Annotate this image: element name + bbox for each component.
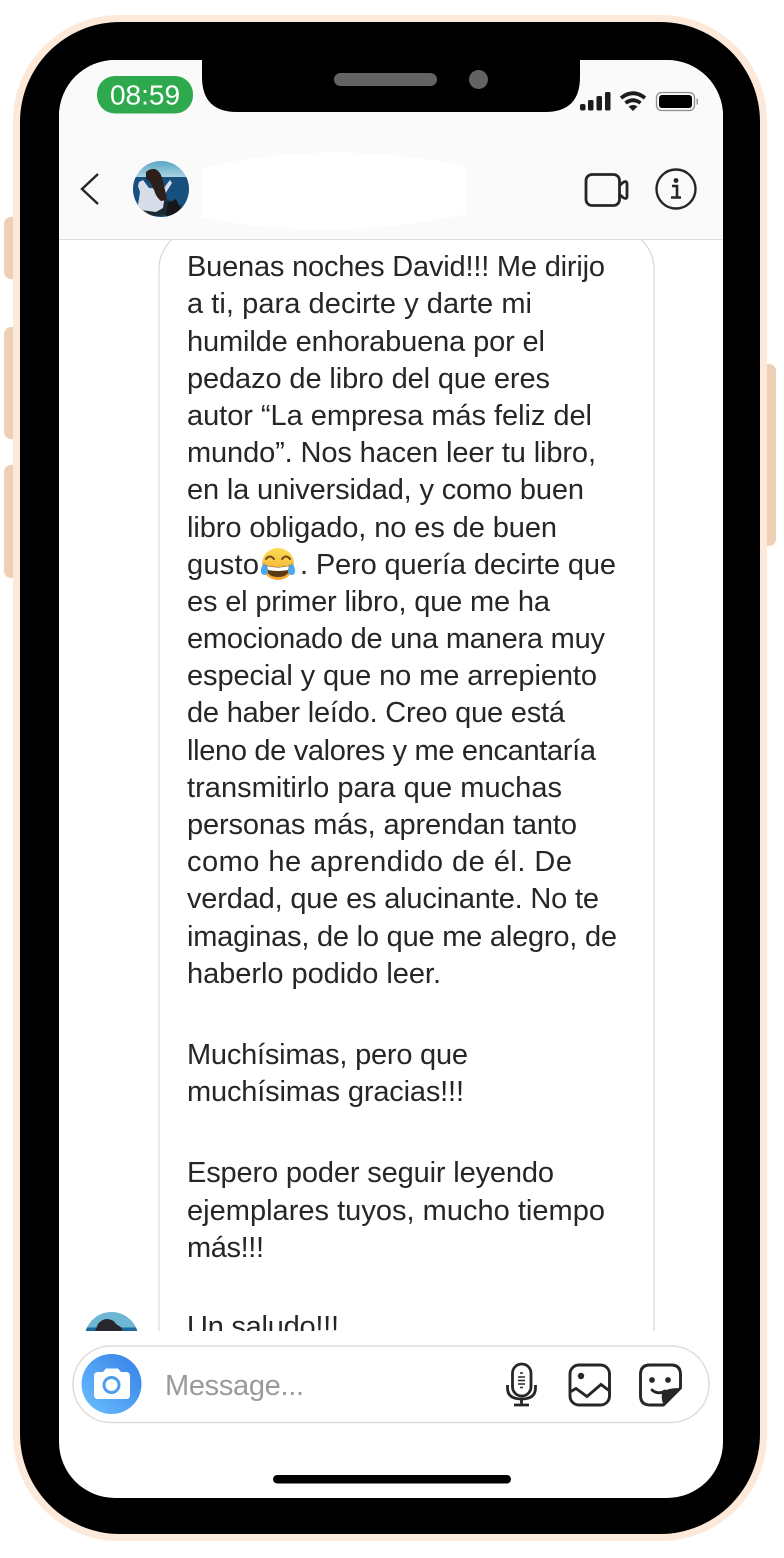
message text: humilde enhorabuena por el (187, 326, 545, 358)
message text: emocionado de una manera muy (187, 623, 606, 655)
sender avatar (cropped) (86, 1312, 138, 1331)
status: battery icon (656, 92, 698, 110)
message input (73, 1346, 709, 1422)
icon: video call (586, 174, 627, 206)
icon: info (656, 170, 696, 208)
icon: sticker (640, 1365, 680, 1405)
message text: Muchísimas, pero que (187, 1039, 468, 1071)
home indicator (273, 1475, 511, 1484)
message text: . Pero quería decirte que (300, 549, 616, 581)
message text: transmitirlo para que muchas (187, 772, 562, 804)
status: time pill (97, 76, 193, 114)
icon: gallery (570, 1365, 610, 1405)
message text: más!!! (187, 1232, 264, 1264)
message text: es el primer libro, que me ha (187, 586, 551, 618)
message text: en la universidad, y como buen (187, 474, 584, 506)
message text: Buenas noches David!!! Me dirijo (187, 251, 605, 283)
message text: haberlo podido leer. (187, 958, 441, 990)
status: time pill: 08:59 (110, 80, 180, 110)
message text: pedazo de libro del que eres (187, 363, 550, 395)
notch camera (469, 70, 488, 89)
message text (187, 251, 617, 1343)
message text: ejemplares tuyos, mucho tiempo (187, 1195, 605, 1227)
status: signal icon (580, 92, 610, 110)
message text: de haber leído. Creo que está (187, 697, 566, 729)
message text: personas más, aprendan tanto (187, 809, 577, 841)
side buttons (4, 217, 776, 578)
message text: verdad, que es alucinante. No te (187, 883, 599, 915)
status: wifi icon (621, 93, 645, 111)
icon: laughing emoji (261, 548, 295, 580)
message bubble (158, 240, 654, 1331)
header bar (59, 60, 723, 240)
icon: camera button (82, 1354, 142, 1414)
message text: especial y que no me arrepiento (187, 660, 597, 692)
message text: lleno de valores y me encantaría (187, 735, 597, 767)
input placeholder: Message... (165, 1370, 304, 1402)
message text: libro obligado, no es de buen (187, 512, 557, 544)
message text: mundo”. Nos hacen leer tu libro, (187, 437, 596, 469)
message area (84, 229, 654, 1529)
icon: microphone (508, 1364, 536, 1405)
contact avatar (133, 161, 189, 217)
message text: Espero poder seguir leyendo (187, 1157, 554, 1189)
redacted name (201, 152, 466, 230)
notch speaker (334, 73, 437, 86)
icon: back arrow (82, 174, 98, 204)
notch (202, 60, 580, 112)
message text: como he aprendido de él. De (187, 846, 572, 878)
message text: autor “La empresa más feliz del (187, 400, 592, 432)
message text: muchísimas gracias!!! (187, 1076, 464, 1108)
message text: a ti, para decirte y darte mi (187, 288, 532, 320)
message text: Un saludo!!! (187, 1311, 339, 1343)
message text: gusto (187, 549, 259, 581)
message text: imaginas, de lo que me alegro, de (187, 921, 617, 953)
